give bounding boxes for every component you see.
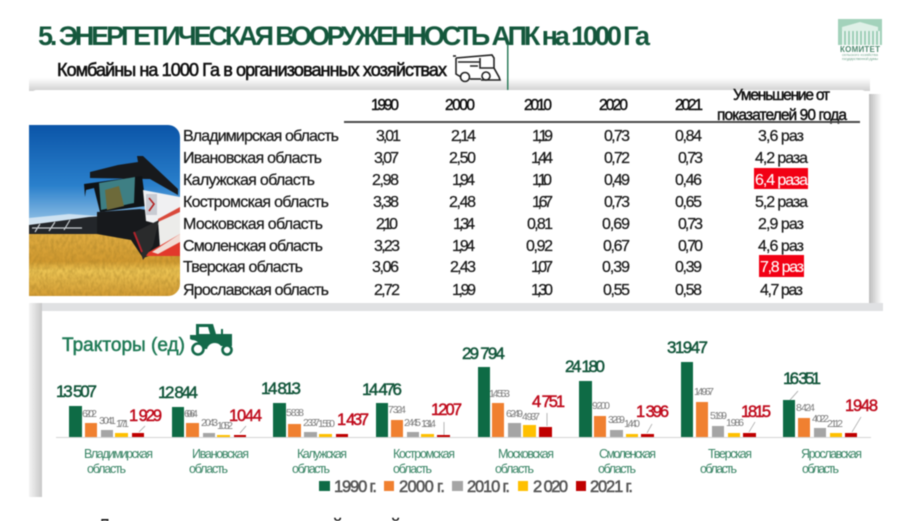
chart group: Московская: 4 937 [522,411,540,423]
chart group: Ярославская: 8 424 [796,402,815,414]
chart group: Калужская: 2 337 [303,417,320,429]
chart group: Ярославская [783,369,878,476]
logo: committee: КОМИТЕТ [840,45,880,54]
table: 1990 column: 3,06 [372,259,399,276]
table: 2021 column: 0,84 [675,128,702,145]
chart group: Смоленская: 9 200 [592,400,610,412]
table: 2021 column: 0,58 [675,282,702,299]
chart group: Тверская: 1815 [741,403,771,421]
title: 5. ЭНЕРГЕТИЧЕСКАЯ ВООРУЖЕННОСТЬ АПК на 1000 Га [38,21,651,51]
chart group: Костромская: Костромская [393,447,455,461]
chart group: Московская: 4 751 [532,393,565,411]
chart group: Тверская: 1 986 [726,417,744,429]
chart group: Костромская: 2 445 [404,417,421,429]
table: 2010 column: 1,67 [532,194,553,211]
chart legend: 2 020 [533,478,568,496]
cropped footer text [97,516,401,521]
chart group: Владимирская: область [87,462,126,476]
chart group: Московская: 6 249 [506,408,523,420]
table: 2021 column: 0,65 [675,194,702,211]
table: decrease column: 4,7 раз [760,282,803,299]
chart group: Костромская: 1207 [431,401,462,419]
photo: combine in wheat field [29,125,180,296]
table: region names: Костромская область [183,194,329,211]
chart group: Тверская: 5 199 [710,410,727,422]
table: 2010 column: 1,10 [532,172,552,189]
chart group: Смоленская: 24 180 [565,357,605,376]
table: 2021 column: 0,39 [675,259,702,276]
highlight: Kaluga decrease [754,168,808,189]
table: 2021 column: 0,73 [678,150,703,167]
table: region names: Ярославская область [183,282,329,299]
chart axis [56,437,871,438]
chart group: Ярославская: 1948 [845,397,878,415]
table: 2021 column: 0,46 [675,172,702,189]
chart legend [319,478,633,496]
table: 2020 column: 0,73 [604,194,630,211]
chart group: Московская: 29 794 [462,344,505,363]
chart group: Костромская: 1 314 [421,418,436,430]
table: 1990 column: 2,10 [376,216,398,233]
chart group: Ивановская: 1 052 [217,420,233,432]
table: 2010 column: 1,30 [531,282,553,299]
chart group: Ярославская: Ярославская [801,447,862,461]
chart group: Владимирская: 6 202 [82,408,97,420]
chart group: Тверская [667,338,771,476]
table: 2000 column: 1,99 [452,282,476,299]
table: 2020 column [602,128,630,299]
table: decrease column: 2,9 раз [758,216,804,233]
icon: combine harvester [453,55,500,82]
table: decrease column: 5,2 раза [755,194,808,211]
table: 2021 column [675,128,703,299]
chart group: Ярославская: 16 351 [783,369,821,388]
chart group: Ярославская: 4 022 [812,413,829,425]
panel: tractors background [42,311,884,497]
chart group: Калужская: 1 437 [337,411,369,429]
table: 2020 column: 0,39 [602,259,630,276]
table header: 1990 [371,97,399,114]
chart group: Смоленская: область [598,462,636,476]
chart group: Ивановская: 6 064 [184,408,198,420]
chart legend: 1990 г. [334,478,377,496]
table: 1990 column: 3,23 [374,238,400,255]
table: decrease column: 7,8 раз [760,259,804,276]
chart group: Калужская: 14 813 [261,379,301,398]
chart group: Владимирская: Владимирская [84,447,153,461]
table: 1990 column: 3,01 [376,128,401,145]
table: 1990 column: 2,98 [372,172,399,189]
table: 2021 column: 0,70 [678,238,703,255]
chart group: Ярославская: 2 112 [827,418,843,430]
table: 2000 column: 1,94 [452,172,475,189]
chart group: Московская: Московская [498,447,554,461]
table header: Уменьшение от [733,87,830,104]
top shadow band [29,78,870,91]
chart group: Московская: область [495,462,534,476]
chart group: Владимирская: 1 929 [129,407,162,425]
table header [371,87,847,124]
chart group: Тверская: 14 967 [694,386,714,398]
table: region names: Калужская область [183,172,315,189]
chart group: Владимирская: 1771 [116,418,129,430]
table: region names: Владимирская область [183,128,339,145]
table header: показателей 90 года [717,107,847,124]
table: 2020 column: 0,49 [604,172,630,189]
table: 2010 column: 1,44 [531,150,553,167]
chart group: Костромская: 7 324 [388,404,406,416]
table: 2000 column: 1,94 [452,238,475,255]
chart legend: 2000 г. [399,478,445,496]
chart group: Ивановская: область [189,462,228,476]
chart group: Ивановская [158,383,262,476]
panel shadow: table [29,94,883,497]
table: 2000 column [449,128,476,299]
table: 2010 column: 1,19 [532,128,553,145]
table: decrease column: 3,6 раз [758,128,804,145]
chart group: Ивановская: 2 043 [201,417,218,429]
subtitle: Комбайны на 1000 Га в организованных хозяйствах [57,60,447,80]
chart group: Смоленская: 3 269 [608,414,625,426]
table: 2000 column: 1,34 [453,216,475,233]
table: 2000 column: 2,50 [449,150,476,167]
table: 2020 column: 0,69 [602,216,630,233]
highlight: Tver decrease [759,255,804,277]
table: region names: Ивановская область [183,150,322,167]
table: 2010 column [526,128,553,299]
chart group: Калужская: область [292,462,330,476]
chart group: Калужская: 5 838 [286,407,304,419]
chart group: Костромская: область [393,462,432,476]
chart group: Владимирская: 3 041 [99,415,116,427]
table: decrease column: 6,4 раза [755,172,808,189]
heading: tractors: Тракторы (ед) [62,335,185,356]
table: 2010 column: 0,92 [526,238,553,255]
table: 2000 column: 2,48 [449,194,476,211]
logo: committee: государственной думы [842,56,878,61]
table: 1990 column: 3,38 [373,194,399,211]
chart group: Владимирская: 13 507 [56,382,97,401]
table: 2020 column: 0,67 [603,238,630,255]
table header: 2000 [445,97,475,114]
table: region names: Смоленская область [183,238,323,255]
chart group: Калужская [261,379,369,476]
table header: 2021 [675,97,703,114]
table: 2021 column: 0,73 [678,216,703,233]
chart group: Калужская: 1 550 [318,418,335,430]
table: region names: Тверская область [183,259,303,276]
table: region names: Московская область [183,216,323,233]
chart group: Калужская: Калужская [297,447,347,461]
panel: table background [29,90,869,302]
table: 1990 column: 3,07 [374,150,399,167]
table: region names [183,128,339,299]
chart group: Тверская: 31947 [667,338,708,357]
chart legend: 2021 г. [590,478,633,496]
table: decrease column [755,128,808,299]
chart group: Смоленская: Смоленская [599,447,656,461]
table: 1990 column [372,128,401,299]
table: decrease column: 4,6 раз [758,238,804,255]
table: 2020 column: 0,55 [603,282,630,299]
table: 2010 column: 0,81 [527,216,553,233]
chart group: Ивановская: 12 844 [158,383,198,402]
table header: 2020 [599,97,628,114]
table: 2000 column: 2,43 [450,259,476,276]
chart group: Костромская [362,380,462,476]
chart group: Тверская: область [700,462,737,476]
table header rule [344,121,860,123]
chart group: Московская [462,344,565,476]
logo: committee [838,19,882,61]
chart group: Ивановская: Ивановская [192,447,249,461]
chart group: Тверская: Тверская [708,447,752,461]
table: 2020 column: 0,72 [604,150,630,167]
table: 2020 column: 0,73 [604,128,630,145]
logo: committee: сельского хозяйства [842,52,879,57]
table: decrease column: 4,2 раза [755,150,808,167]
table: 1990 column: 2,72 [374,282,400,299]
chart group: Смоленская: 1 396 [636,403,669,421]
vertical accent line [507,44,508,90]
chart group: Смоленская [565,357,669,476]
chart group: Костромская: 14 476 [362,380,402,399]
chart group: Ярославская: область [802,462,839,476]
chart group: Владимирская [56,382,162,476]
chart legend: 2010 г. [467,478,510,496]
table header: 2010 [524,97,552,114]
chart group: Московская: 14 553 [489,388,510,400]
table: 2000 column: 2,14 [451,128,476,145]
chart group: Смоленская: 1 440 [624,418,640,430]
icon: tractor [190,324,232,354]
chart group: Ивановская: 1044 [229,407,262,425]
table: 2010 column: 1,07 [531,259,553,276]
